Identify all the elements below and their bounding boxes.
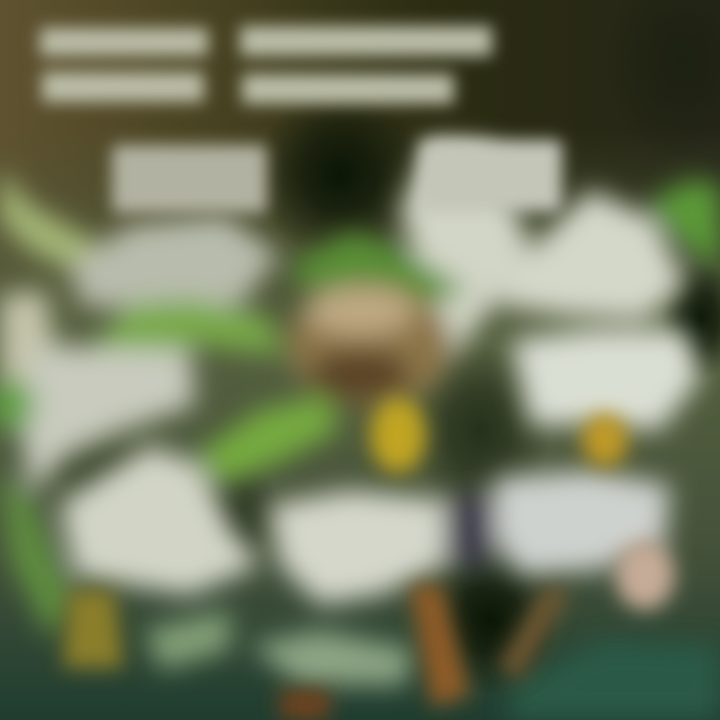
stem: lower right — [497, 585, 570, 680]
leaf: lower centre pale — [250, 630, 415, 685]
flower: lower centre — [270, 490, 445, 605]
petal: pink bud — [615, 540, 675, 610]
details — [63, 397, 675, 720]
leaf: middle — [195, 395, 340, 485]
flower: yellow centre right — [582, 413, 628, 467]
flower: middle left — [20, 345, 195, 495]
stem: orange lower centre — [410, 585, 470, 708]
leaf: top right — [645, 180, 720, 265]
flower: lower right — [490, 470, 670, 575]
flower: upper left petal — [70, 215, 280, 312]
callout: right label box — [420, 140, 562, 212]
leaf: top left stem — [0, 170, 110, 280]
leaf: upper left — [90, 300, 285, 360]
flower: upper right petals — [400, 140, 530, 360]
leaf: left edge — [0, 378, 34, 432]
leaf: left stem — [0, 470, 75, 640]
flower: yellow centre — [370, 397, 426, 473]
leaf: top centre — [285, 232, 470, 305]
flower: left edge — [0, 290, 55, 385]
flower: brown seed head — [288, 283, 452, 407]
callout: left label box — [112, 145, 267, 213]
shadow: dark gap — [445, 495, 495, 565]
stem: yellow lower left — [63, 590, 124, 668]
title — [40, 26, 492, 104]
flower: right middle — [512, 330, 700, 430]
leaf: lower right — [505, 640, 720, 720]
stem: bottom — [280, 690, 330, 720]
flower: lower left — [60, 445, 260, 595]
